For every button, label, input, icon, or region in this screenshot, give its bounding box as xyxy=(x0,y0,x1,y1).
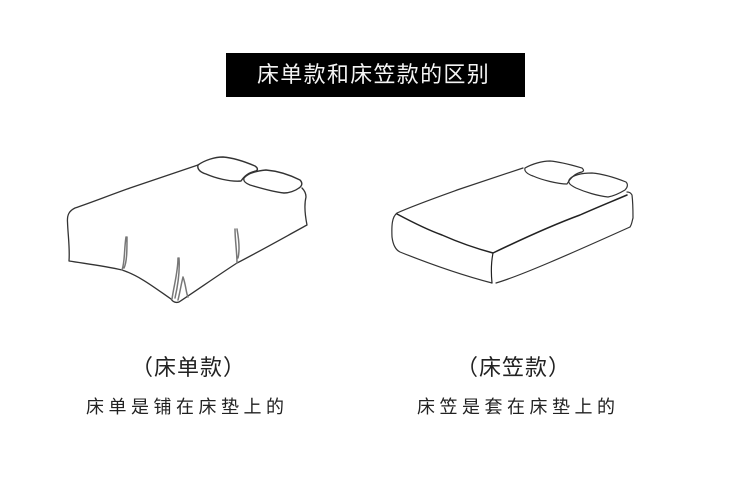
fitted sheet outline xyxy=(392,168,633,283)
sheet outline xyxy=(67,165,307,302)
sheet folds xyxy=(122,229,239,300)
left pillow xyxy=(525,161,584,184)
icon: flat bed sheet xyxy=(67,157,307,302)
right caption: 床笠是套在床垫上的 xyxy=(417,397,620,417)
mattress top edge xyxy=(397,195,627,253)
left caption: 床单是铺在床垫上的 xyxy=(86,397,288,417)
mattress corner seam xyxy=(491,253,493,283)
title banner xyxy=(226,53,525,97)
left label: （床单款） xyxy=(131,355,246,380)
left pillow xyxy=(198,157,257,181)
right pillow xyxy=(244,170,302,193)
right label: （床笠款） xyxy=(456,355,571,380)
icon: fitted bed sheet xyxy=(392,161,633,283)
title text: 床单款和床笠款的区别 xyxy=(257,62,490,87)
right pillow xyxy=(569,173,627,197)
